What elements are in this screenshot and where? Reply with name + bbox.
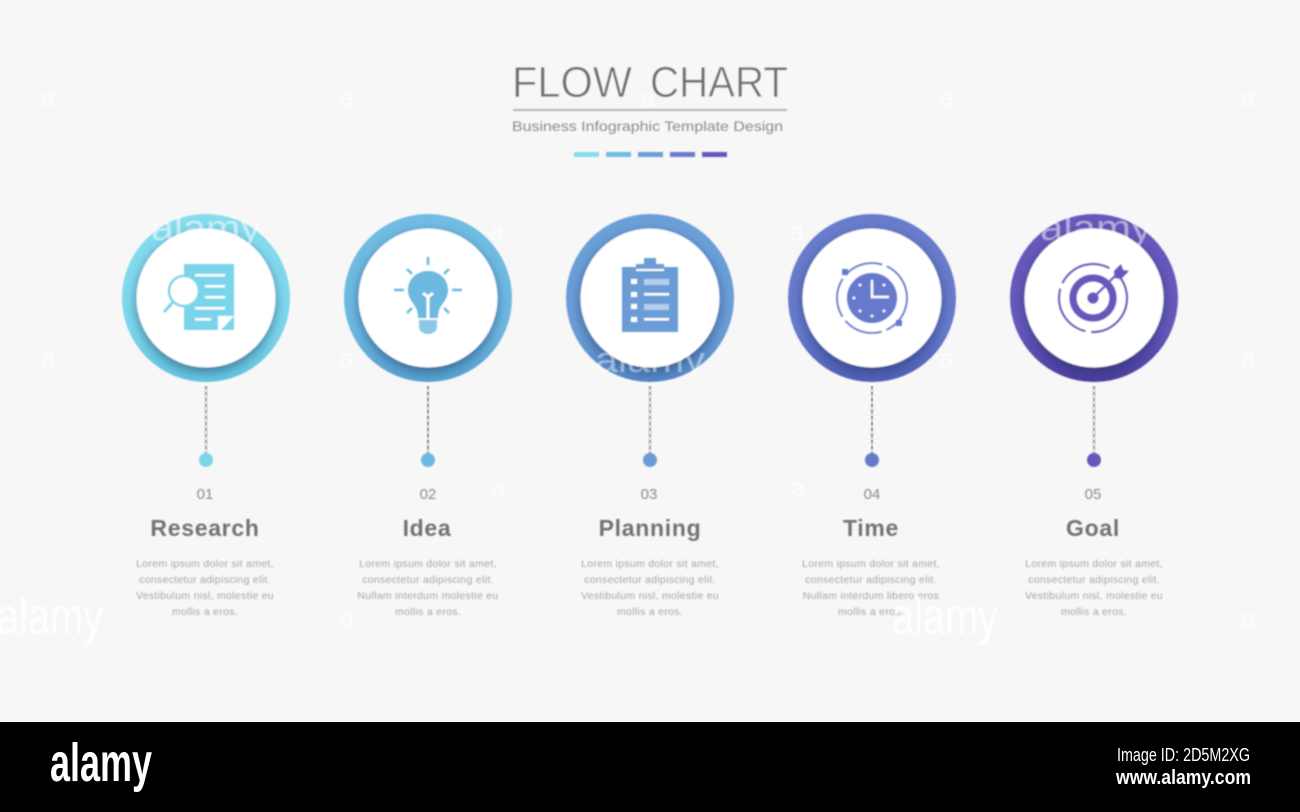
icon: light bulb: [394, 257, 462, 334]
step text 3: mollis a eros.: [617, 606, 683, 618]
step text 4: Time: [843, 515, 899, 541]
watermarks: a: [490, 216, 505, 246]
step text 2: Lorem ipsum dolor sit amet,: [359, 558, 497, 570]
node 2: [421, 453, 435, 467]
step text 5: Lorem ipsum dolor sit amet,: [1025, 558, 1163, 570]
watermarks: [0, 82, 1256, 646]
website: www.alamy.com: [1115, 767, 1251, 789]
watermarks: alamy: [892, 588, 998, 646]
footer logo: alamy: [50, 733, 152, 793]
connector 3: [648, 386, 652, 454]
step text 2: Nullam interdum molestie eu: [357, 590, 499, 602]
footer bar: [0, 722, 1300, 812]
ring 5: [1010, 214, 1178, 382]
connector 4: [870, 386, 874, 454]
step text 4: [802, 486, 940, 618]
watermarks: alamy: [1040, 207, 1152, 248]
node 5: [1087, 453, 1101, 467]
step text 2: Idea: [403, 515, 451, 541]
icon: clock: [837, 263, 907, 333]
watermarks: a: [340, 603, 355, 633]
icon: document with magnifier: [164, 264, 234, 330]
step text 3: Vestibulum nisl, molestie eu: [581, 590, 719, 602]
step text 5: consectetur adipiscing elit.: [1028, 574, 1160, 586]
ring 3: [566, 214, 734, 382]
step text 1: 01: [197, 486, 213, 503]
watermarks: a: [641, 82, 656, 112]
ring 4: [788, 214, 956, 382]
step text 4: Nullam interdum libero eros: [803, 590, 939, 602]
watermarks: a: [491, 473, 506, 503]
step text 5: [1025, 486, 1163, 618]
step text 3: 03: [641, 486, 657, 503]
icon: target: [1059, 264, 1129, 332]
panel: step 5 goal: [1010, 214, 1178, 618]
panel: step 2 idea: [344, 214, 512, 618]
ring 1: [122, 214, 290, 382]
watermarks: a: [1241, 343, 1256, 373]
watermarks: a: [940, 82, 955, 112]
step text 4: mollis a eros.: [838, 606, 904, 618]
watermarks: a: [340, 343, 355, 373]
step text 3: [581, 486, 719, 618]
icon: clipboard: [622, 258, 678, 332]
step text 4: 04: [864, 486, 880, 503]
title underline: [513, 109, 787, 111]
step text 2: mollis a eros.: [395, 606, 461, 618]
watermarks: alamy: [151, 207, 261, 248]
node 1: [199, 453, 213, 467]
step text 3: Lorem ipsum dolor sit amet,: [581, 558, 719, 570]
node 4: [865, 453, 879, 467]
watermarks: a: [1241, 82, 1256, 112]
ring 2: [344, 214, 512, 382]
watermarks: a: [790, 216, 805, 246]
connector 5: [1092, 386, 1096, 454]
connector 2: [426, 386, 430, 454]
panel: step 1 research: [122, 214, 290, 618]
step text 1: mollis a eros.: [172, 606, 238, 618]
watermarks: a: [340, 82, 355, 112]
title block: [512, 58, 788, 157]
panel: step 3 planning: [566, 214, 734, 618]
step text 2: consectetur adipiscing elit.: [362, 574, 494, 586]
step text 1: [136, 486, 274, 618]
watermarks: a: [41, 343, 56, 373]
step text 1: consectetur adipiscing elit.: [139, 574, 271, 586]
step text 4: consectetur adipiscing elit.: [805, 574, 937, 586]
colour key dashes: [574, 152, 727, 157]
watermarks: alamy: [595, 339, 705, 380]
subtitle: Business Infographic Template Design: [512, 118, 783, 134]
step text 5: mollis a eros.: [1061, 606, 1127, 618]
step text 1: Lorem ipsum dolor sit amet,: [136, 558, 274, 570]
step text 2: [357, 486, 499, 618]
title: FLOW: [512, 58, 632, 107]
step text 2: 02: [420, 486, 436, 503]
step text 4: Lorem ipsum dolor sit amet,: [802, 558, 940, 570]
watermarks: a: [791, 473, 806, 503]
step text 3: Planning: [599, 515, 701, 541]
step text 5: Vestibulum nisl, molestie eu: [1025, 590, 1163, 602]
watermarks: a: [41, 82, 56, 112]
step text 1: Research: [150, 515, 260, 541]
watermarks: a: [1241, 603, 1256, 633]
title: CHART: [650, 58, 788, 107]
step text 1: Vestibulum nisl, molestie eu: [136, 590, 274, 602]
image id: Image ID: 2D5M2XG: [1117, 745, 1250, 765]
step text 5: Goal: [1066, 515, 1120, 541]
connector 1: [204, 386, 208, 454]
panel: step 4 time: [788, 214, 956, 618]
node 3: [643, 453, 657, 467]
step text 5: 05: [1085, 486, 1101, 503]
watermarks: a: [940, 343, 955, 373]
step text 3: consectetur adipiscing elit.: [584, 574, 716, 586]
watermarks: alamy: [0, 588, 103, 646]
